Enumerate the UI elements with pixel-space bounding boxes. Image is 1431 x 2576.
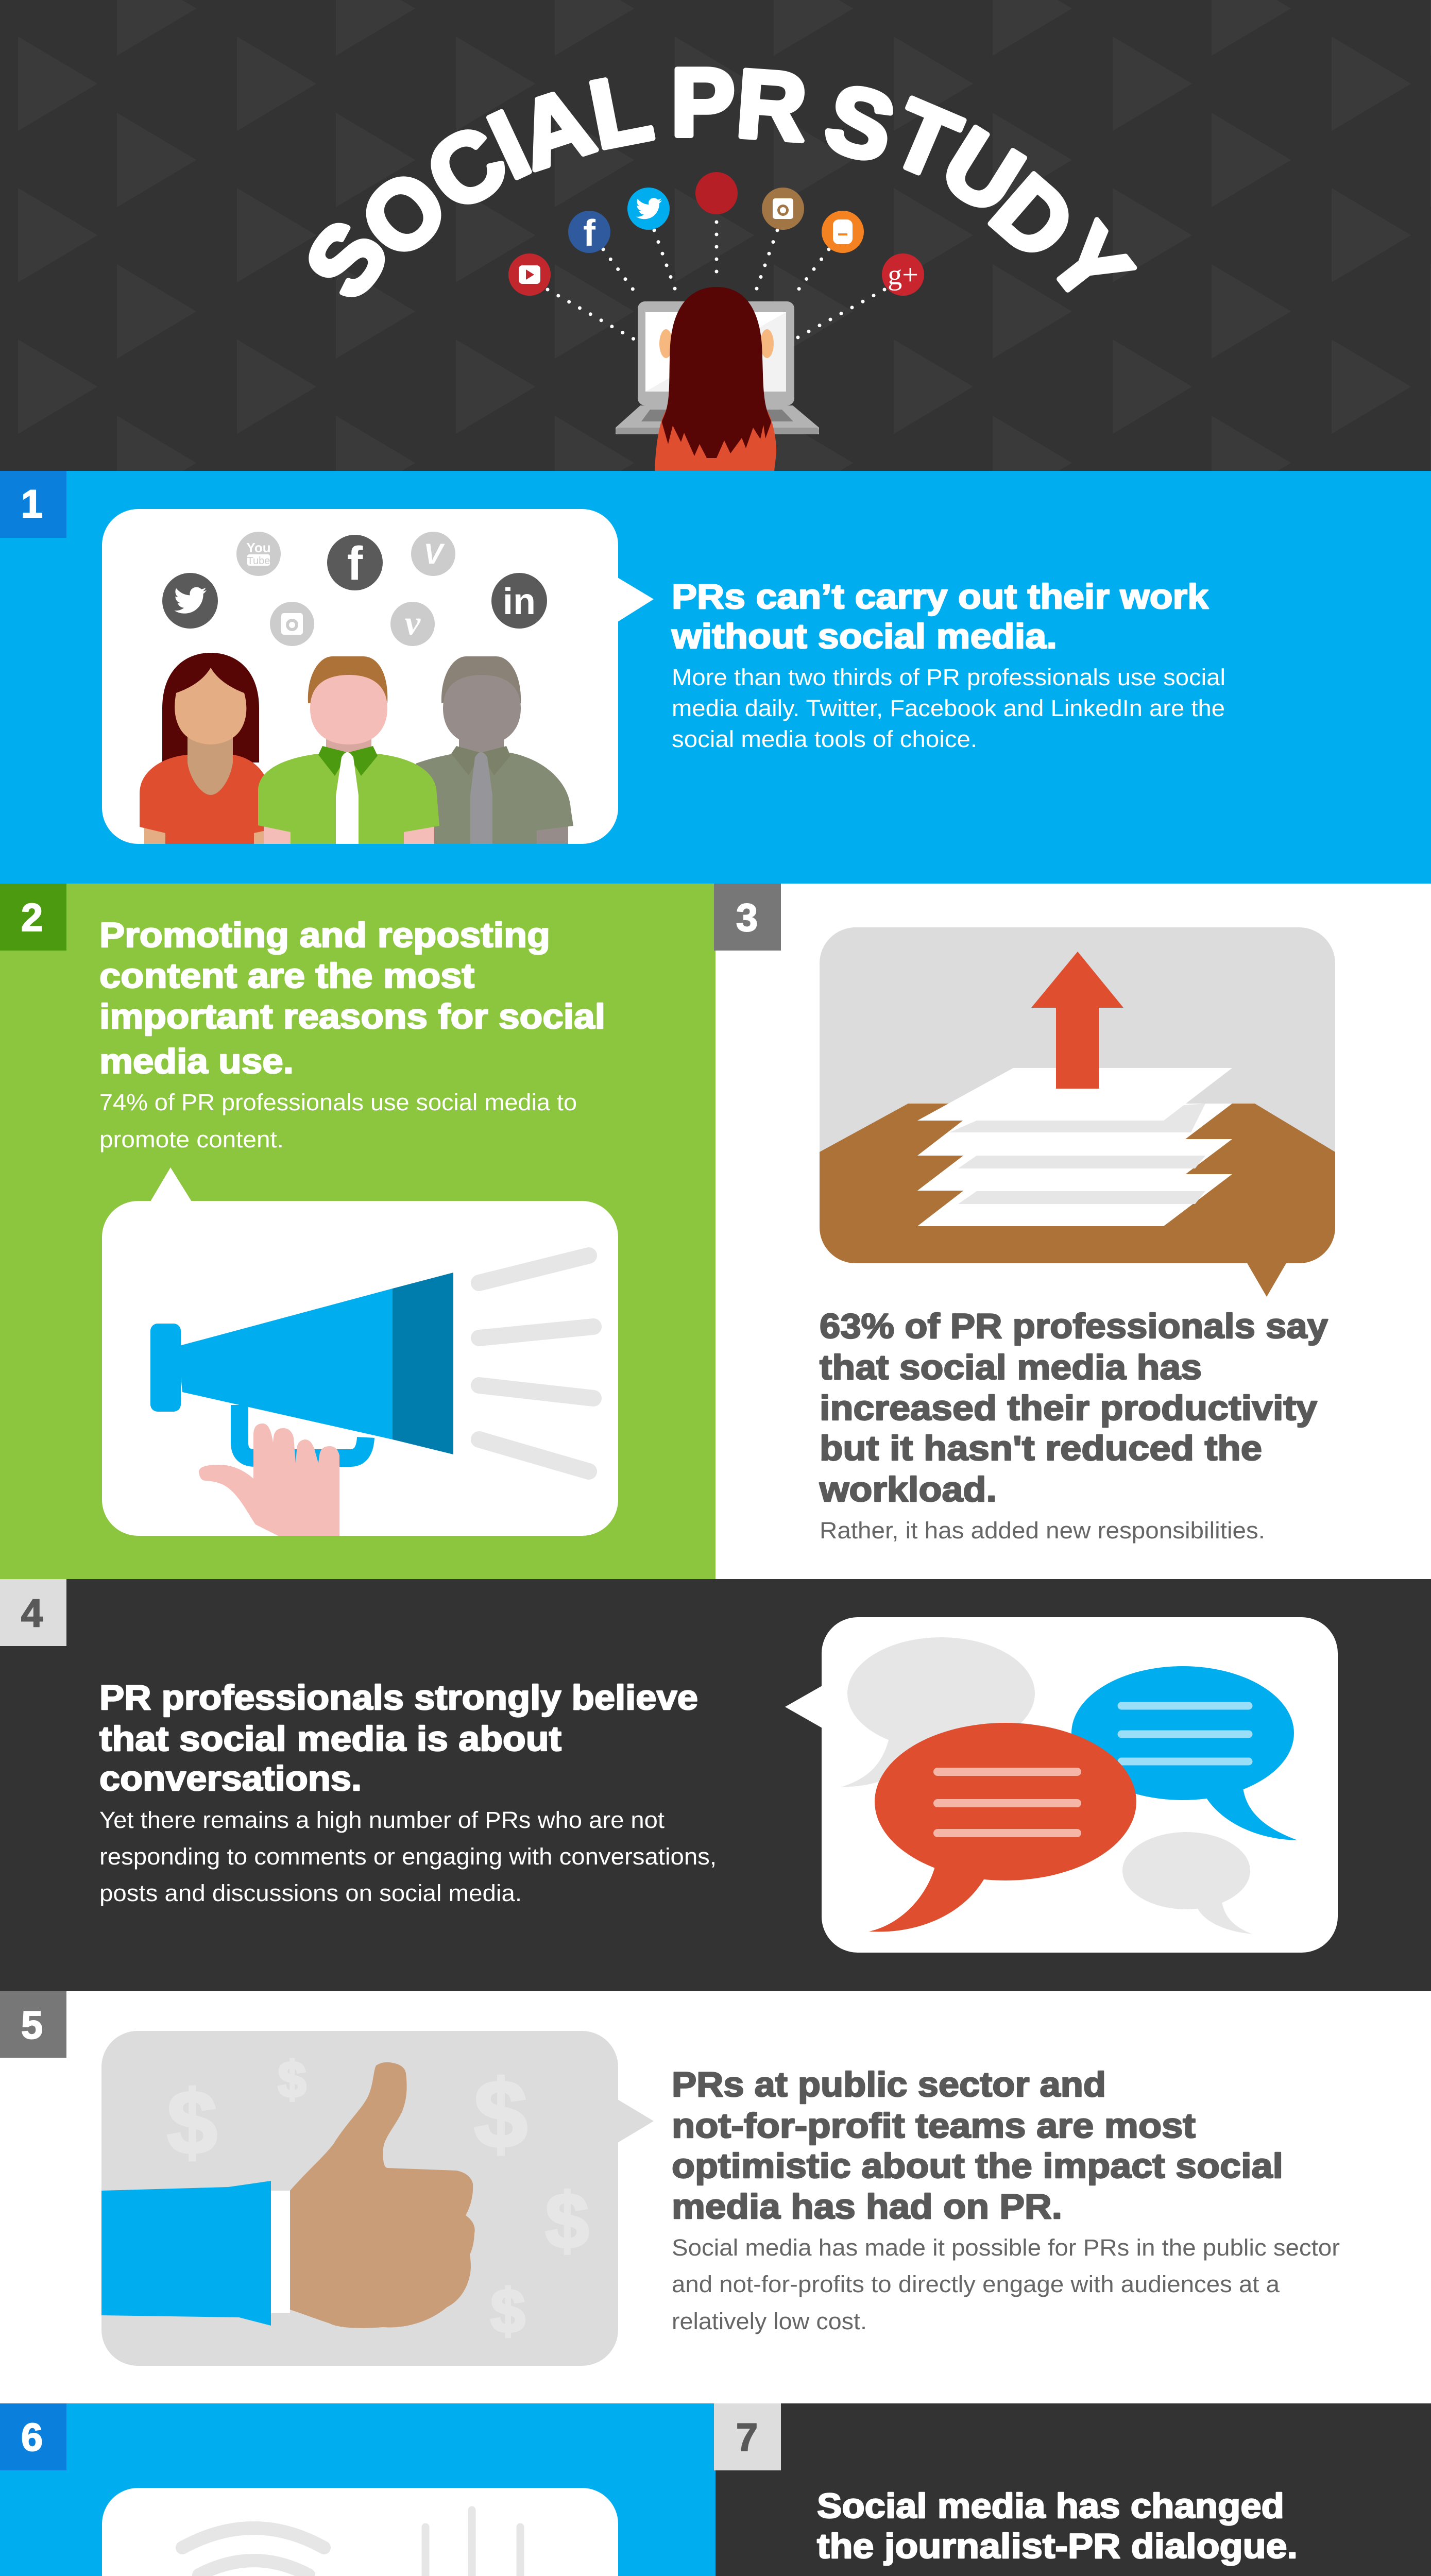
- icon: linkedin grey: [491, 573, 547, 629]
- panel: section 3: [714, 884, 1335, 1544]
- person seen from behind: [655, 287, 776, 471]
- body text 2: 74% of PR professionals use social media to: [99, 1089, 577, 1115]
- icon: twitter grey: [162, 573, 218, 629]
- heading 5: [672, 2065, 1283, 2226]
- body text 3: Rather, it has added new responsibilities.: [820, 1517, 1265, 1544]
- heading 5: not-for-profit teams are most: [672, 2106, 1196, 2145]
- panel: header: [0, 0, 1431, 471]
- icon: facebook grey: f: [347, 537, 363, 590]
- speech bubble with megaphone: [102, 1167, 618, 1536]
- badge 2: 2: [21, 896, 43, 940]
- badge 5: [0, 1991, 66, 2058]
- icon: google plus: [882, 253, 924, 296]
- icon: vimeo grey: [390, 602, 435, 646]
- speech bubble with phone and envelope: [102, 2488, 618, 2576]
- badge 1: [0, 471, 66, 538]
- icon: youtube grey: You: [246, 540, 271, 555]
- title: SOCIAL PR STUDY: [284, 48, 1152, 323]
- sound lines: [479, 1256, 593, 1471]
- panel: section 4: [0, 1579, 1431, 1991]
- icon: instagram grey: [270, 602, 314, 646]
- heading 7: Social media has changed: [817, 2486, 1284, 2526]
- badge 4: [0, 1579, 66, 1646]
- icon: youtube grey: Tube: [247, 555, 270, 567]
- body text 5: [672, 2234, 1340, 2334]
- panel: section 1: [0, 471, 1431, 884]
- icon: linkedin grey: in: [503, 581, 536, 622]
- body text 5: relatively low cost.: [672, 2308, 867, 2334]
- heading 2: media use.: [99, 1042, 294, 1081]
- badge 7: 7: [736, 2416, 758, 2460]
- signal arcs: [182, 2528, 324, 2575]
- person: grey man: [412, 656, 573, 844]
- heading 4: [99, 1678, 698, 1798]
- dollar signs: $: [546, 2177, 589, 2265]
- panel: section 7: [714, 2403, 1431, 2576]
- body text 4: responding to comments or engaging with conversations,: [99, 1843, 717, 1870]
- badge 5: 5: [21, 2004, 43, 2047]
- dollar signs: $: [491, 2277, 525, 2346]
- heading 4: conversations.: [99, 1759, 362, 1798]
- icon: facebook grey: [327, 535, 383, 590]
- speech bubble with people: [102, 509, 654, 844]
- heading 5: optimistic about the impact social: [672, 2146, 1283, 2185]
- icon: blogger: [822, 211, 864, 253]
- body text 1: social media tools of choice.: [672, 726, 977, 752]
- heading 1: PRs can’t carry out their work: [672, 577, 1208, 616]
- panel: section 6: [0, 2403, 716, 2576]
- heading 3: workload.: [819, 1470, 997, 1509]
- body text 2: promote content.: [99, 1126, 284, 1153]
- heading 1: [671, 577, 1208, 656]
- icon: up arrow: [1031, 952, 1123, 1089]
- heading 2: important reasons for social: [99, 997, 605, 1036]
- badge 4: 4: [21, 1591, 43, 1635]
- heading 5: PRs at public sector and: [672, 2065, 1106, 2104]
- speech bubble with conversation icons: [785, 1617, 1338, 1953]
- heading 3: 63% of PR professionals say: [820, 1307, 1328, 1346]
- badge 6: 6: [21, 2416, 43, 2460]
- icon: red bubble: [869, 1723, 1136, 1932]
- body text 4: posts and discussions on social media.: [99, 1880, 522, 1906]
- icon: hand: [199, 1423, 339, 1536]
- icon: vine grey: [411, 532, 455, 576]
- dotted connector lines: [548, 222, 884, 340]
- body text 1: More than two thirds of PR professionals use social: [672, 664, 1225, 690]
- person: green man: [258, 656, 439, 844]
- icon: facebook: f: [583, 213, 596, 254]
- body text 5: Social media has made it possible for PRs in the public sector: [672, 2234, 1340, 2261]
- icon: youtube: [508, 253, 551, 296]
- icon: youtube grey: [236, 532, 281, 576]
- dollar signs: $: [278, 2051, 306, 2108]
- body text 5: and not-for-profits to directly engage with audiences at a: [672, 2271, 1280, 2297]
- icon: red circle: [695, 172, 738, 214]
- heading 2: content are the most: [99, 956, 474, 995]
- panel: section 2: [0, 884, 716, 1579]
- dollar signs: $: [474, 2060, 527, 2168]
- badge 3: 3: [736, 896, 758, 940]
- icon: vine grey: V: [423, 537, 445, 570]
- heading 7: [817, 2486, 1298, 2566]
- body text 1: [672, 664, 1225, 752]
- badge 2: [0, 884, 66, 951]
- heading 5: media has had on PR.: [672, 2187, 1062, 2226]
- heading 4: that social media is about: [99, 1719, 561, 1758]
- heading 7: the journalist-PR dialogue.: [817, 2527, 1298, 2566]
- stack of papers: [917, 1068, 1232, 1226]
- icon: small grey bubble: [1122, 1832, 1252, 1934]
- falling lines: [425, 2510, 520, 2576]
- speech bubble with thumbs up: [101, 2031, 654, 2366]
- heading 3: increased their productivity: [820, 1388, 1317, 1428]
- body text 1: media daily. Twitter, Facebook and LinkedIn are the: [672, 695, 1225, 721]
- panel: section 5: [0, 1991, 1431, 2403]
- icon: megaphone: [150, 1273, 453, 1458]
- heading 2: [99, 916, 605, 1081]
- heading 3: but it hasn't reduced the: [820, 1429, 1262, 1468]
- badge 7: [714, 2403, 781, 2470]
- heading 1: without social media.: [671, 617, 1057, 656]
- body text 4: Yet there remains a high number of PRs who are not: [99, 1807, 665, 1833]
- icon: vimeo grey: v: [405, 603, 421, 642]
- heading 3: [819, 1307, 1328, 1509]
- icon: thumbs up hand: [101, 2062, 475, 2328]
- person: woman: [140, 653, 270, 844]
- heading 3: that social media has: [820, 1348, 1202, 1387]
- heading 2: Promoting and reposting: [99, 916, 550, 955]
- body text 4: [99, 1807, 717, 1906]
- icon: google plus: g+: [888, 259, 918, 291]
- body text 2: [99, 1089, 577, 1153]
- icon: grey bubble: [842, 1637, 1035, 1787]
- dollar signs: $: [167, 2073, 217, 2173]
- icon: instagram: [762, 188, 804, 230]
- icon: twitter: [627, 188, 670, 230]
- icon: blue bubble: [1071, 1666, 1298, 1840]
- heading 4: PR professionals strongly believe: [99, 1678, 698, 1717]
- speech bubble with paper stack: [820, 927, 1335, 1297]
- laptop: [616, 301, 819, 434]
- icon: facebook: [568, 211, 610, 254]
- dollar signs: [167, 2051, 589, 2346]
- badge 6: [0, 2403, 66, 2470]
- badge 3: [714, 884, 781, 951]
- badge 1: 1: [21, 482, 43, 526]
